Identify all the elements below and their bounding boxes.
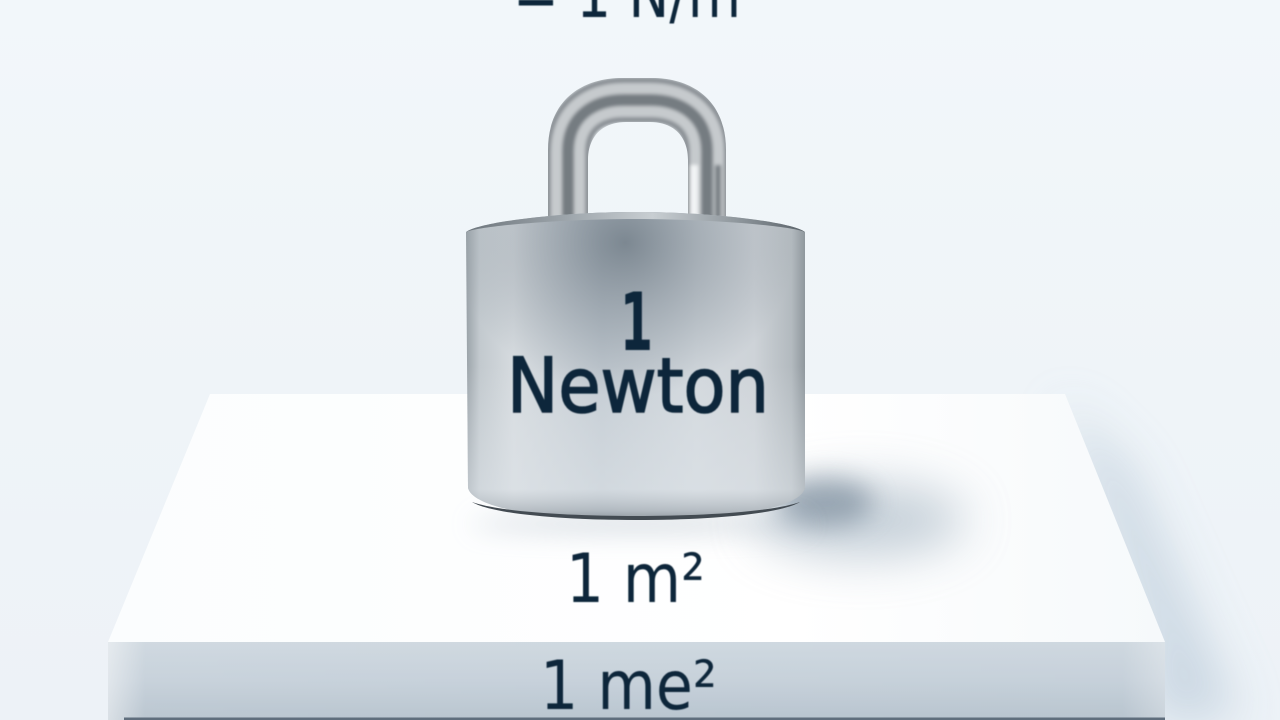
slab bottom edge [124,718,1165,720]
slab top surface [108,394,1165,642]
shackle [568,100,718,225]
bottom rim [472,502,800,520]
top rim [466,212,805,232]
weight cast shadow [470,478,965,558]
weight label: 1 Newton [507,276,769,430]
slab outer shadow [1060,400,1240,720]
icon: padlock-shaped weight [466,100,805,520]
slab front face [108,642,1165,720]
weight label: 1 Newton: 1 [620,276,653,369]
weight label: 1 Newton: Newton [507,341,769,430]
slab: one square metre platform [108,394,1240,720]
body [466,212,805,520]
label: 1 m² on slab top: 1 m² [566,540,705,619]
